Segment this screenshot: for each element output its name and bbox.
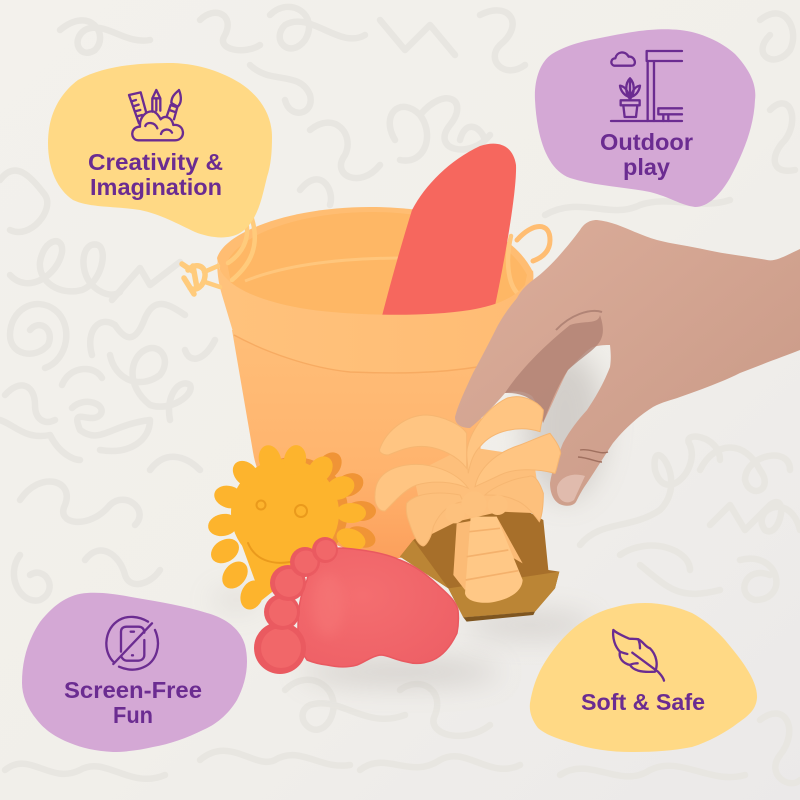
shovel	[381, 144, 516, 320]
sun mould	[206, 443, 379, 613]
thumbnail	[557, 475, 585, 502]
shadows of hand and toys	[210, 350, 605, 684]
sand mould boat	[400, 502, 559, 622]
hand	[455, 220, 800, 506]
label: Creativity &	[88, 149, 223, 175]
bucket rim collar	[217, 258, 533, 373]
foot mould	[254, 537, 458, 674]
label: Soft & Safe	[581, 689, 705, 715]
badge: creativity and imagination: Imagination	[90, 174, 222, 200]
blob	[535, 29, 755, 207]
icon: shelter with plant	[611, 51, 682, 121]
badge: screen-free fun: Fun	[113, 702, 153, 728]
badge: outdoor play	[535, 29, 755, 207]
bucket handle loop right	[517, 226, 550, 261]
palm frond backing	[413, 447, 542, 537]
sun shadow side	[240, 447, 379, 565]
bucket handle knot left	[182, 213, 255, 294]
sun rays and face	[206, 443, 369, 613]
palm trunk	[453, 517, 523, 590]
blob	[48, 63, 272, 237]
label: Outdoor	[600, 129, 693, 155]
icon: crossed out phone	[106, 617, 158, 670]
icon: art tools in cloud	[129, 90, 183, 140]
palm fronds	[375, 397, 561, 546]
palm tree mould	[375, 397, 561, 603]
badge: soft and safe	[530, 603, 757, 752]
bucket lower body	[232, 330, 483, 558]
bucket interior	[217, 207, 533, 330]
badge: outdoor play: play	[623, 154, 670, 180]
blob	[530, 603, 757, 752]
palm coconuts	[445, 491, 508, 523]
badge: creativity and imagination	[48, 63, 272, 237]
blob	[22, 593, 247, 752]
icon: feather leaf	[613, 630, 664, 681]
badge: screen-free fun	[22, 593, 247, 752]
finger shading	[505, 315, 603, 423]
bucket	[182, 144, 550, 558]
bucket right strap	[508, 236, 521, 296]
label: Screen-Free	[64, 677, 202, 703]
